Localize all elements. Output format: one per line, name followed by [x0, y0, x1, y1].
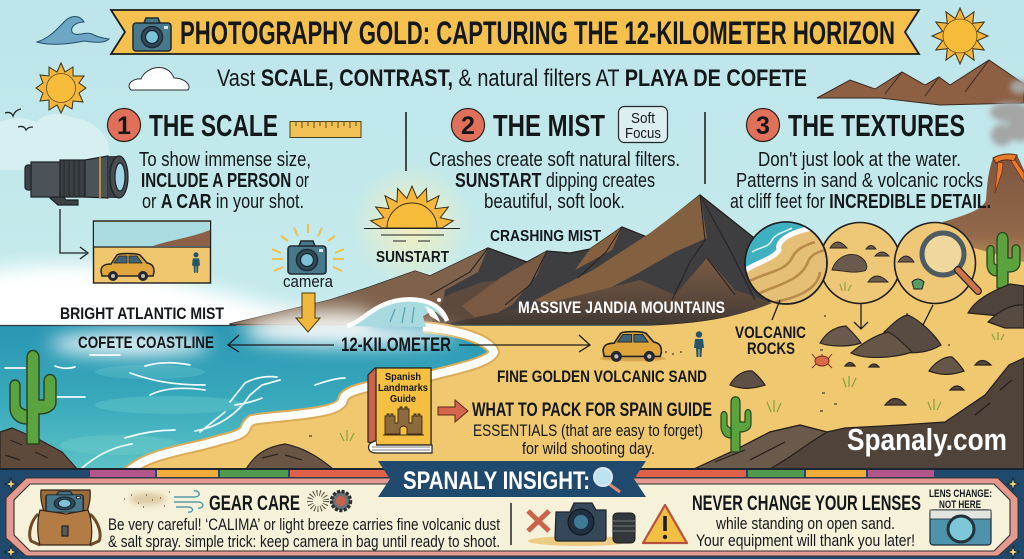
right rocks [968, 284, 1024, 328]
sand under camera [528, 536, 632, 546]
label: lens change not here [929, 488, 992, 511]
icon: sunstart sun [364, 186, 460, 241]
panel: the textures [730, 108, 991, 213]
text block: the mist [429, 149, 680, 213]
connector lines [772, 300, 933, 329]
label: volcanic rocks: ROCKS [747, 339, 795, 358]
label: sunstart: SUNSTART [376, 249, 449, 266]
text block: what to pack: for wild shooting day. [522, 439, 655, 458]
icon: camera bag [30, 490, 100, 545]
volcano smoke [990, 80, 1024, 146]
icon: dust and wind [124, 491, 203, 512]
detail: magnifier circle [894, 222, 978, 304]
icon: ruler [290, 122, 361, 138]
centre rock [246, 444, 333, 469]
icon: sun right [932, 8, 988, 64]
lenses text: while standing on open sand. [715, 514, 895, 533]
label: fine golden volcanic sand: FINE GOLDEN VOLCANIC SAND [497, 367, 707, 386]
icon: castle [383, 407, 424, 435]
person on sand [694, 331, 704, 357]
icon: camera with rays [272, 224, 344, 274]
heading: gear care: GEAR CARE [209, 492, 300, 515]
label: crashing mist: CRASHING MIST [490, 228, 601, 245]
icon: wave [37, 16, 109, 44]
heading: the mist: THE MIST [493, 108, 605, 143]
dark rock bottom right [694, 358, 1024, 469]
left mist cloud [0, 265, 320, 340]
label: volcanic rocks: VOLCANIC [735, 323, 806, 342]
book: spanish landmarks guide [368, 368, 432, 453]
book: spanish landmarks guide: Landmarks [378, 383, 428, 394]
sand ground [0, 240, 1024, 470]
icon: telephoto lens [25, 156, 128, 205]
Jandia mountains [230, 195, 772, 325]
right cactus [987, 232, 1020, 288]
label: volcanic rocks [735, 323, 806, 358]
subtitle: Vast SCALE, CONTRAST, & natural filters AT PLAYA DE COFETE [217, 65, 807, 92]
pale cloud left [0, 114, 112, 170]
frame [6, 478, 1018, 556]
label: lens change not here: LENS CHANGE: [929, 488, 992, 500]
crab [812, 354, 832, 368]
insight banner [378, 461, 646, 497]
icon: dslr camera [555, 503, 606, 541]
volcano [943, 154, 1024, 300]
car on sand [600, 332, 666, 362]
text block: what to pack: WHAT TO PACK FOR SPAIN GUIDE [472, 400, 712, 421]
icon: warning triangle [643, 505, 687, 543]
text block: the mist: SUNSTART dipping creates [455, 170, 655, 192]
title banner [111, 10, 919, 54]
insight banner: SPANALY INSIGHT: [403, 467, 590, 495]
mist over coast [50, 308, 455, 355]
book: spanish landmarks guide: Guide [390, 394, 416, 405]
divider [704, 112, 706, 184]
gear care text: & salt spray. simple trick: keep camera in bag until ready to shoot. [108, 532, 500, 551]
number badge 3: 3 [756, 112, 770, 140]
divider [405, 112, 407, 171]
number badge 1 [108, 108, 140, 142]
icon: birds [5, 109, 33, 130]
stars [5, 478, 1019, 558]
divider [510, 503, 512, 545]
sun glow [350, 163, 474, 287]
panel: the mist [429, 106, 680, 213]
text block: the scale [139, 149, 311, 213]
text block: the scale: INCLUDE A PERSON or [141, 170, 309, 192]
volcanic rock pile [730, 315, 991, 405]
car in photo [101, 254, 154, 281]
icon: camera in banner [133, 18, 171, 51]
left cactus [10, 350, 56, 444]
text block: the scale: To show immense size, [139, 149, 311, 171]
shore foam [128, 327, 494, 472]
label: 12-kilometer: 12-KILOMETER [341, 335, 451, 356]
icon: cloud [129, 68, 189, 90]
arrow: red to guide [438, 400, 468, 422]
text block: the mist: Crashes create soft natural filters. [429, 149, 680, 171]
arrow: left distance [228, 335, 334, 352]
person in photo [192, 252, 200, 273]
text block: what to pack: ESSENTIALS (that are easy to forget) [473, 421, 703, 440]
icon: sun left [36, 63, 86, 113]
number badge 3 [746, 108, 780, 142]
icon: blue camera [930, 510, 991, 545]
colour strip [90, 470, 934, 477]
soft focus tag [618, 106, 668, 142]
gear care text: Be very careful! ‘CALIMA’ or light breeze carries fine volcanic dust [108, 515, 500, 534]
lenses text [696, 514, 915, 550]
detail: sand and sea circle [740, 215, 827, 304]
text block: the mist: beautiful, soft look. [484, 191, 625, 213]
label: lens change not here: NOT HERE [939, 499, 981, 511]
soft focus tag: Focus [625, 125, 661, 142]
icon: red x [528, 511, 549, 531]
soft focus tag: Soft [631, 110, 656, 127]
far mountains [817, 60, 1024, 105]
text block: the textures: Don't just look at the water. [758, 149, 961, 171]
arrow: lens to photo [60, 209, 88, 259]
small cactus [721, 397, 751, 452]
number badge 2 [452, 108, 484, 142]
texture circles [740, 215, 978, 304]
heading: never change your lenses: NEVER CHANGE YOUR LENSES [692, 492, 921, 515]
text block: the textures [730, 149, 991, 213]
gear care text [108, 515, 500, 551]
text block: the scale: or A CAR in your shot. [142, 191, 304, 213]
icon: dust dots and gear [310, 492, 350, 510]
detail: rocks circle [820, 222, 900, 304]
icon: lens [613, 513, 635, 543]
arrow: yellow down [296, 293, 320, 332]
grass tufts [340, 332, 1004, 441]
ocean [0, 326, 494, 472]
background sky [0, 0, 1024, 330]
number badge 1: 1 [117, 112, 131, 140]
sand specks [309, 314, 950, 436]
label: cofete coastline: COFETE COASTLINE [78, 333, 214, 352]
panel: spanaly insight [0, 461, 1024, 559]
left rock [0, 428, 78, 470]
number badge 2: 2 [461, 112, 475, 140]
label: camera: camera [283, 272, 333, 291]
scale example photo [94, 221, 210, 283]
arrow: right distance [459, 335, 590, 352]
text block: what to pack [472, 400, 712, 458]
book: spanish landmarks guide: Spanish [385, 372, 421, 383]
heading: the scale: THE SCALE [149, 108, 278, 143]
text block: the textures: Patterns in sand & volcanic rocks [736, 170, 983, 192]
heading: the textures: THE TEXTURES [788, 108, 965, 143]
lenses text: Your equipment will thank you later! [696, 531, 915, 550]
label: massive jandia mountains: MASSIVE JANDIA MOUNTAINS [518, 298, 725, 317]
icon: magnifier [594, 468, 620, 492]
crashing wave [347, 298, 447, 327]
label: bright atlantic mist: BRIGHT ATLANTIC MIST [60, 304, 225, 323]
panel: the scale [108, 108, 361, 213]
